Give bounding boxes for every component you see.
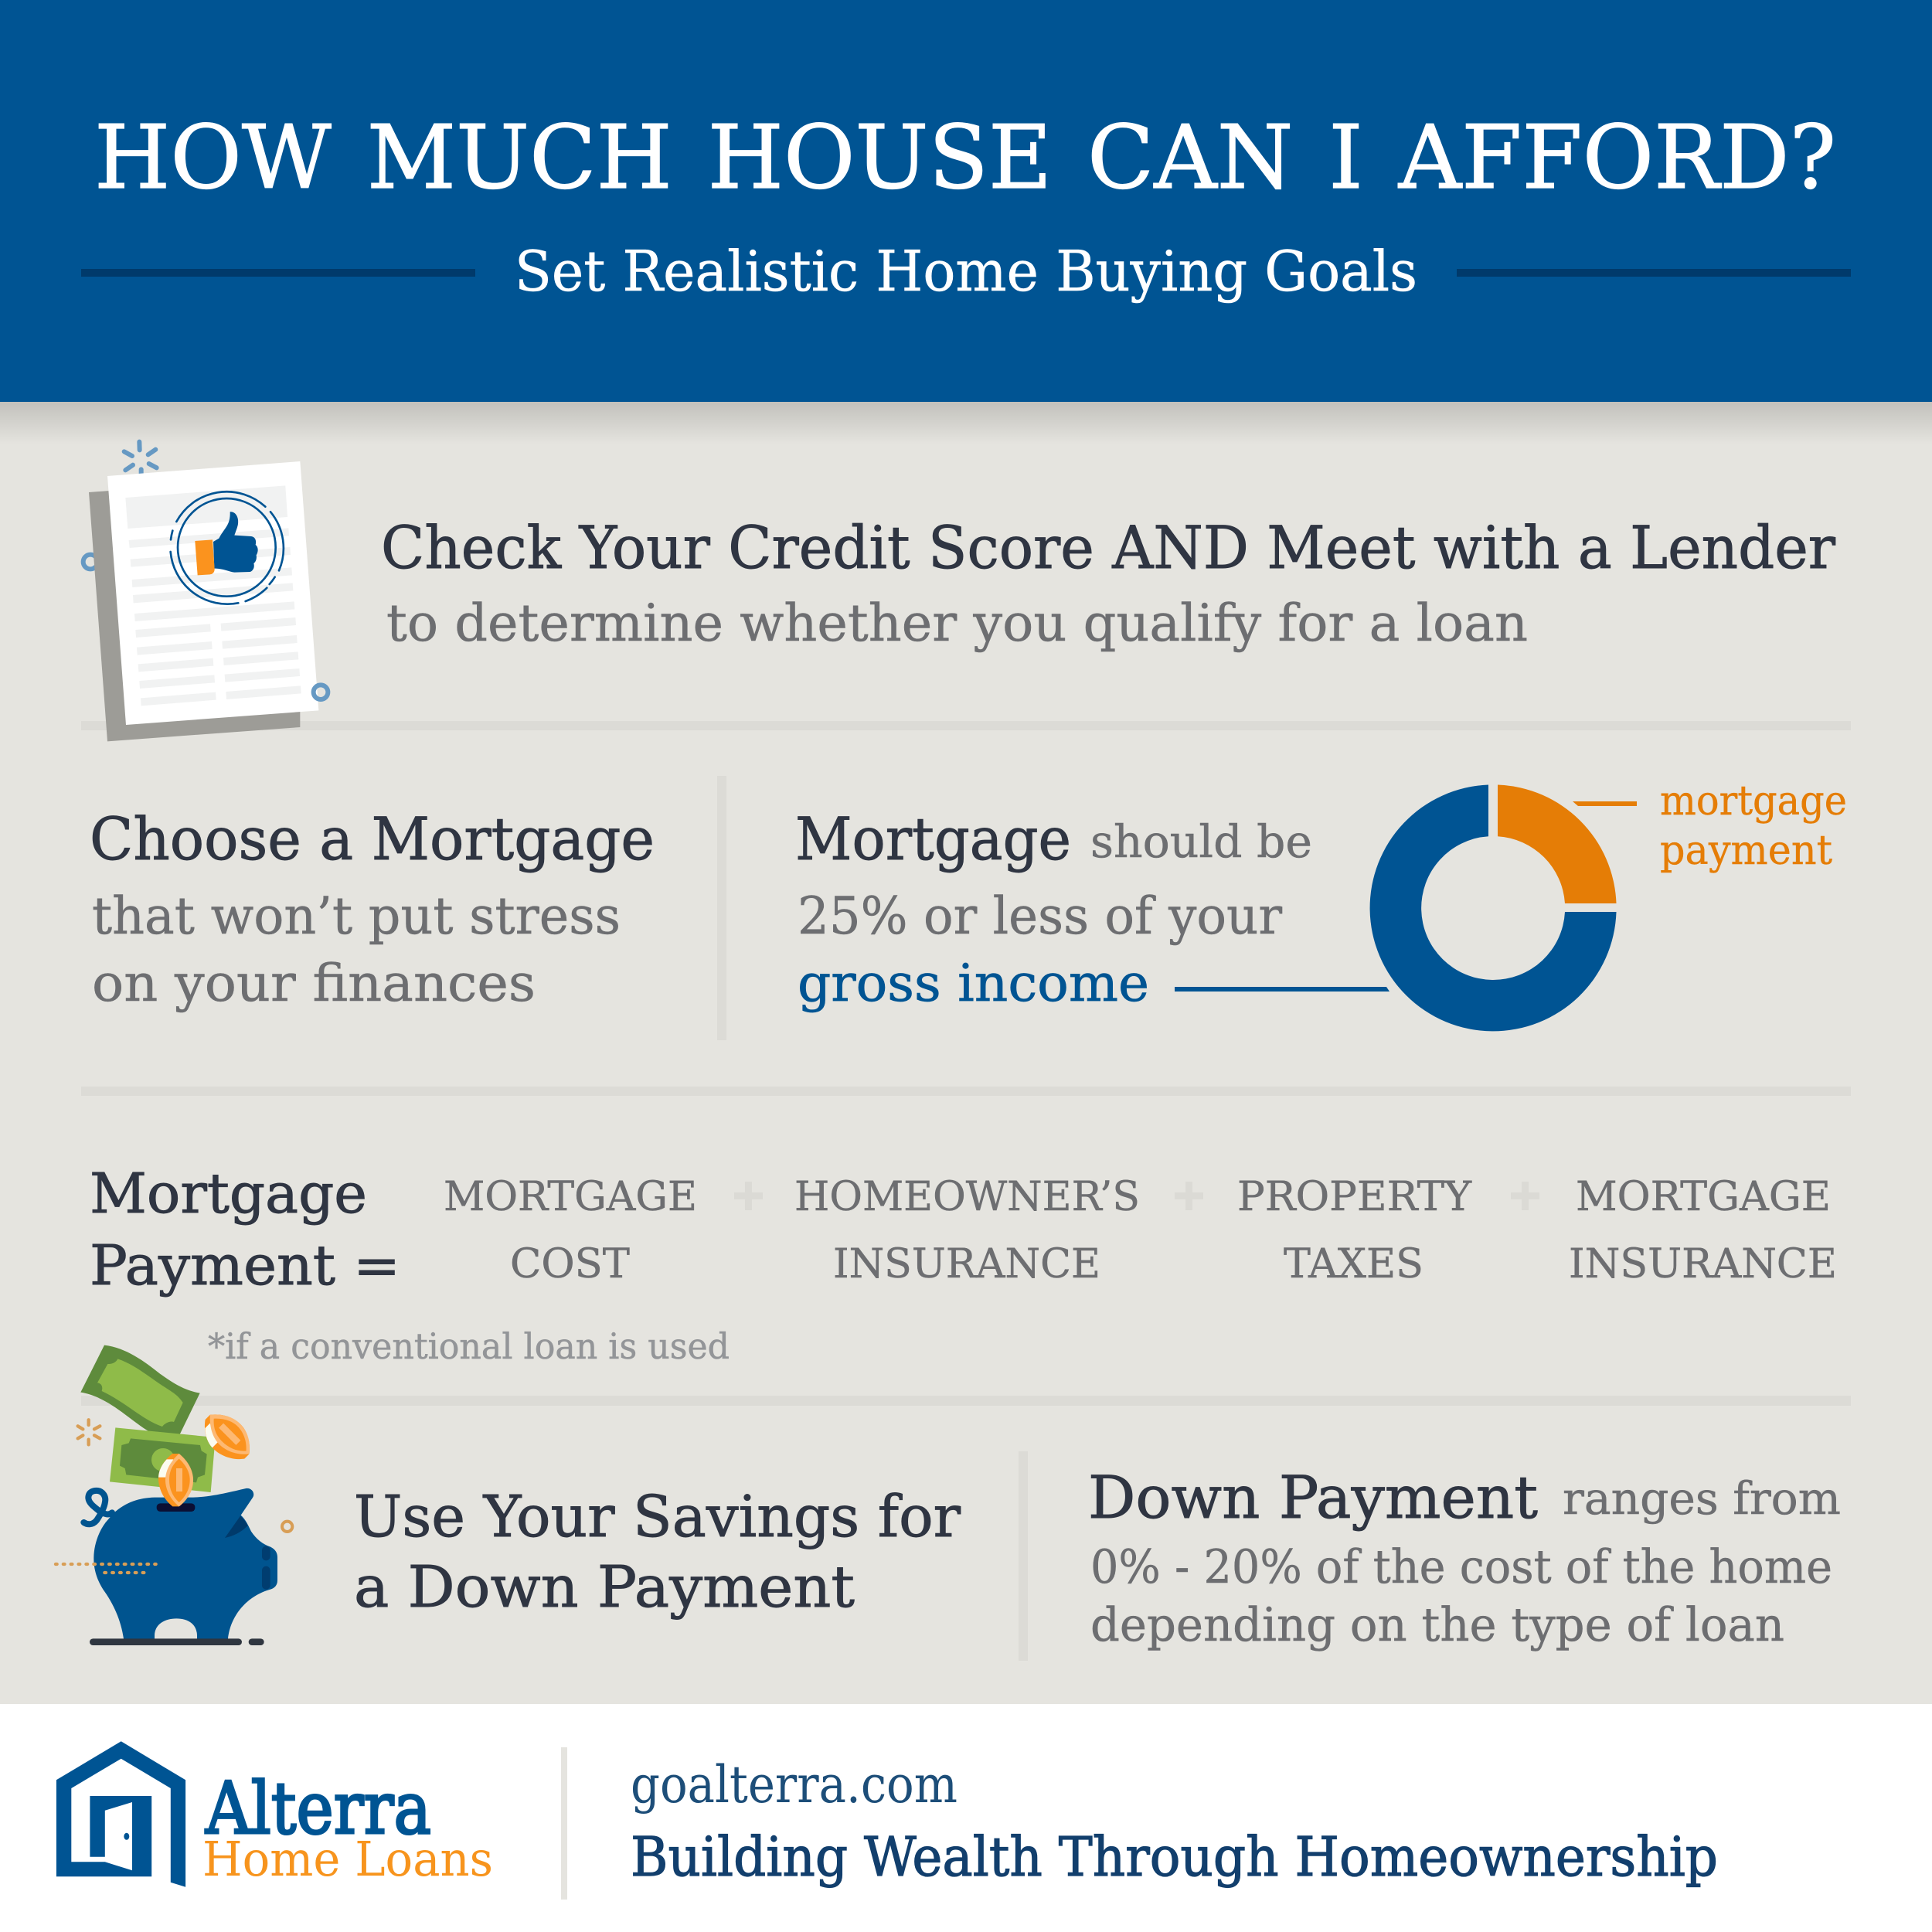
label: payment	[1660, 828, 1832, 874]
panel: savings	[354, 1484, 961, 1621]
term: INSURANCE	[1569, 1241, 1837, 1287]
heading: Choose a Mortgage	[90, 804, 655, 873]
heading: Mortgage	[795, 804, 1071, 873]
heading: Use Your Savings for	[354, 1484, 961, 1550]
subtitle: Set Realistic Home Buying Goals	[515, 239, 1417, 304]
icon: document with thumbs up	[83, 442, 328, 741]
text line: on your finances	[92, 954, 536, 1013]
website: goalterra.com	[631, 1755, 957, 1815]
panel: footer	[0, 1704, 1932, 1932]
subtitle rule right	[1457, 269, 1851, 277]
label: mortgage	[1660, 778, 1847, 825]
plus	[1175, 1182, 1203, 1210]
donut: mortgage payment	[1498, 785, 1617, 903]
term: COST	[510, 1241, 630, 1287]
text: depending on the type of loan	[1090, 1598, 1784, 1652]
leader line: mortgage payment	[1573, 801, 1637, 806]
panel: mortgage 25 percent	[795, 778, 1847, 1031]
heading: Check Your Credit Score AND Meet with a Lender	[381, 513, 1836, 582]
text: gross income	[798, 954, 1149, 1013]
term: MORTGAGE	[444, 1174, 697, 1220]
term: MORTGAGE	[1576, 1174, 1831, 1220]
leader line: gross income	[1175, 987, 1389, 992]
panel: payment formula	[90, 1162, 1837, 1367]
logo: house	[56, 1741, 185, 1887]
text: ranges from	[1563, 1472, 1841, 1525]
panel: credit score	[381, 513, 1836, 653]
text: 25% or less of your	[798, 886, 1282, 946]
icon: piggy bank with money	[56, 1345, 292, 1645]
logo: Alterra: Alterra	[205, 1767, 431, 1850]
term: HOMEOWNER’S	[794, 1174, 1140, 1220]
footnote: *if a conventional loan is used	[208, 1325, 730, 1367]
logo: Home Loans: Home Loans	[202, 1831, 493, 1887]
term: INSURANCE	[833, 1241, 1100, 1287]
panel: header	[0, 0, 1932, 402]
heading: Payment =	[90, 1233, 400, 1298]
heading: a Down Payment	[354, 1554, 855, 1621]
tagline: Building Wealth Through Homeownership	[631, 1825, 1718, 1889]
panel: down payment	[1088, 1463, 1841, 1652]
heading: Down Payment	[1088, 1463, 1538, 1532]
plus	[1511, 1182, 1539, 1210]
text: 0% - 20% of the cost of the home	[1090, 1540, 1832, 1594]
text line: that won’t put stress	[92, 886, 621, 946]
panel: choose a mortgage	[90, 804, 655, 1013]
donut chart	[1370, 785, 1617, 1031]
plus	[734, 1182, 763, 1210]
term: PROPERTY	[1237, 1174, 1472, 1220]
term: TAXES	[1284, 1241, 1423, 1287]
text: to determine whether you qualify for a loan	[386, 594, 1528, 653]
donut: remaining income	[1370, 785, 1617, 1031]
heading: Mortgage	[90, 1162, 367, 1226]
title: HOW MUCH HOUSE CAN I AFFORD?	[94, 107, 1836, 209]
subtitle rule left	[81, 269, 475, 277]
text: should be	[1090, 815, 1312, 868]
